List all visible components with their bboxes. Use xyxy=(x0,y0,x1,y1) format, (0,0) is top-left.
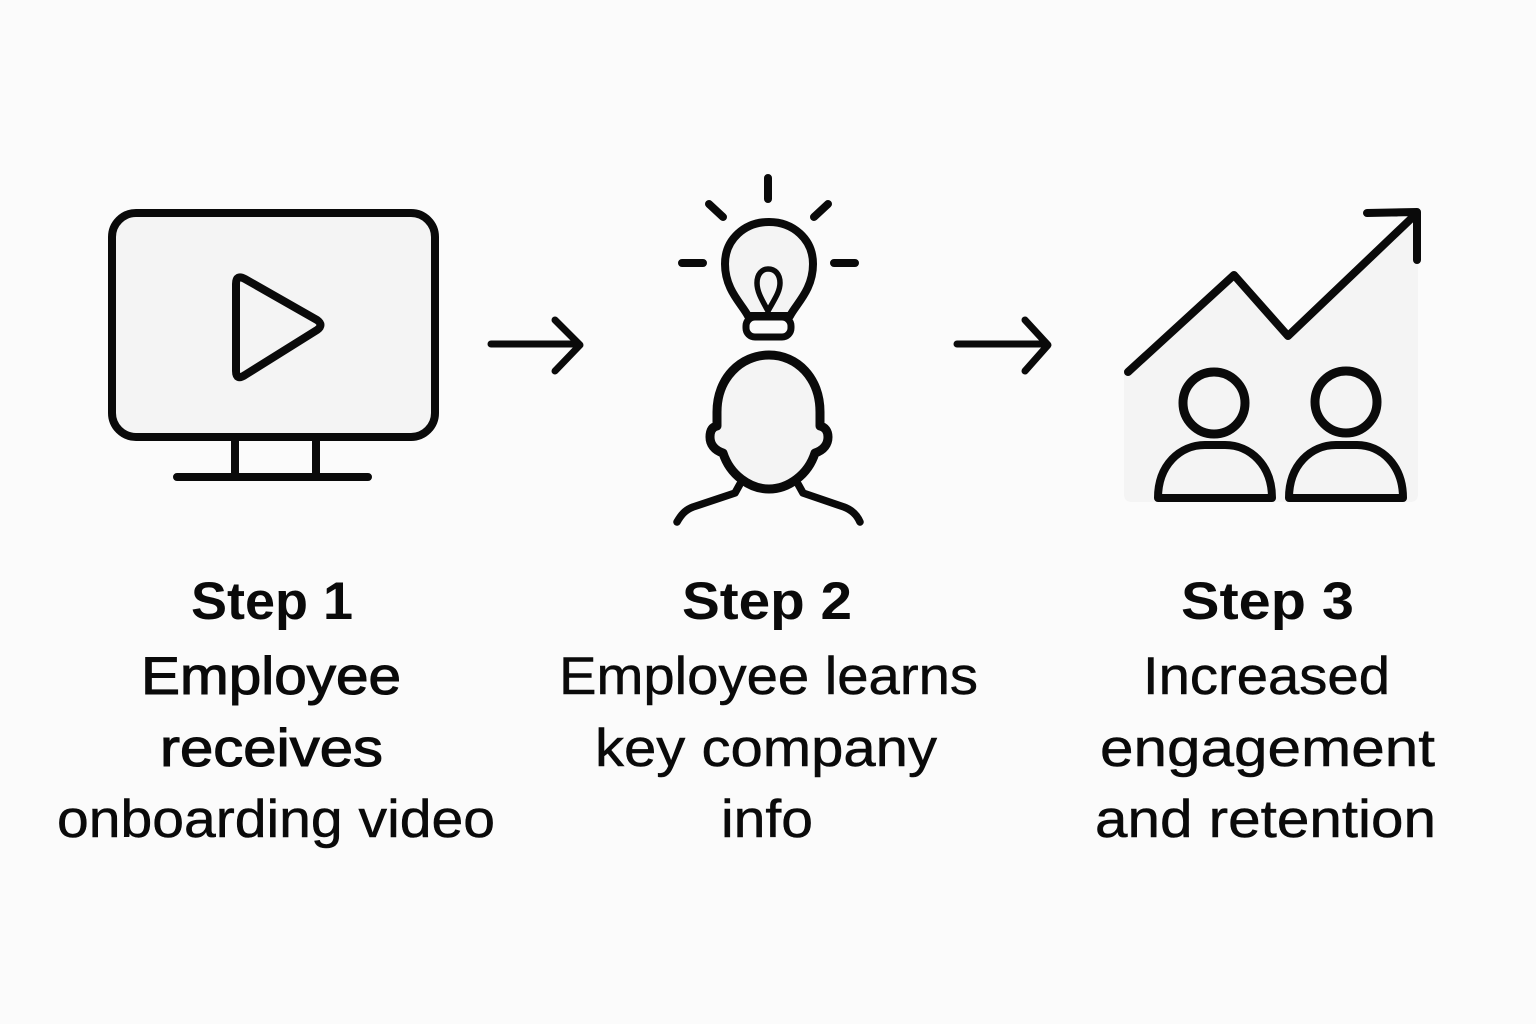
icon: head and shoulders xyxy=(677,355,860,522)
text block: step 1: Step 1 xyxy=(191,572,353,631)
text block: step 2: Step 2 xyxy=(682,572,852,631)
text block: step 2: Employee learns xyxy=(559,647,978,706)
arrow: step 1 to step 2 xyxy=(491,320,580,371)
icon: person with light bulb xyxy=(677,178,860,522)
icon: monitor with play button xyxy=(112,213,435,477)
text block: step 3: engagement xyxy=(1100,719,1435,778)
chart background xyxy=(1124,212,1418,502)
text block: step 3: Increased xyxy=(1143,647,1390,706)
text block: step 3: Step 3 xyxy=(1181,572,1354,631)
arrow: step 2 to step 3 xyxy=(957,320,1048,371)
person right xyxy=(1289,371,1403,498)
icon: growth chart with two people xyxy=(1124,212,1418,502)
text block: step 3 xyxy=(1095,572,1436,849)
text block: step 2 xyxy=(559,572,978,849)
text block: step 1 xyxy=(57,572,495,849)
text block: step 1: onboarding video xyxy=(57,790,495,849)
person left xyxy=(1158,372,1272,498)
text block: step 1: receives xyxy=(160,719,383,778)
text block: step 2: key company xyxy=(595,719,938,778)
trend arrow xyxy=(1128,212,1417,372)
text block: step 2: info xyxy=(721,790,813,849)
text block: step 3: and retention xyxy=(1095,790,1436,849)
text block: step 1: Employee xyxy=(141,647,401,706)
icon: light bulb xyxy=(682,178,855,337)
